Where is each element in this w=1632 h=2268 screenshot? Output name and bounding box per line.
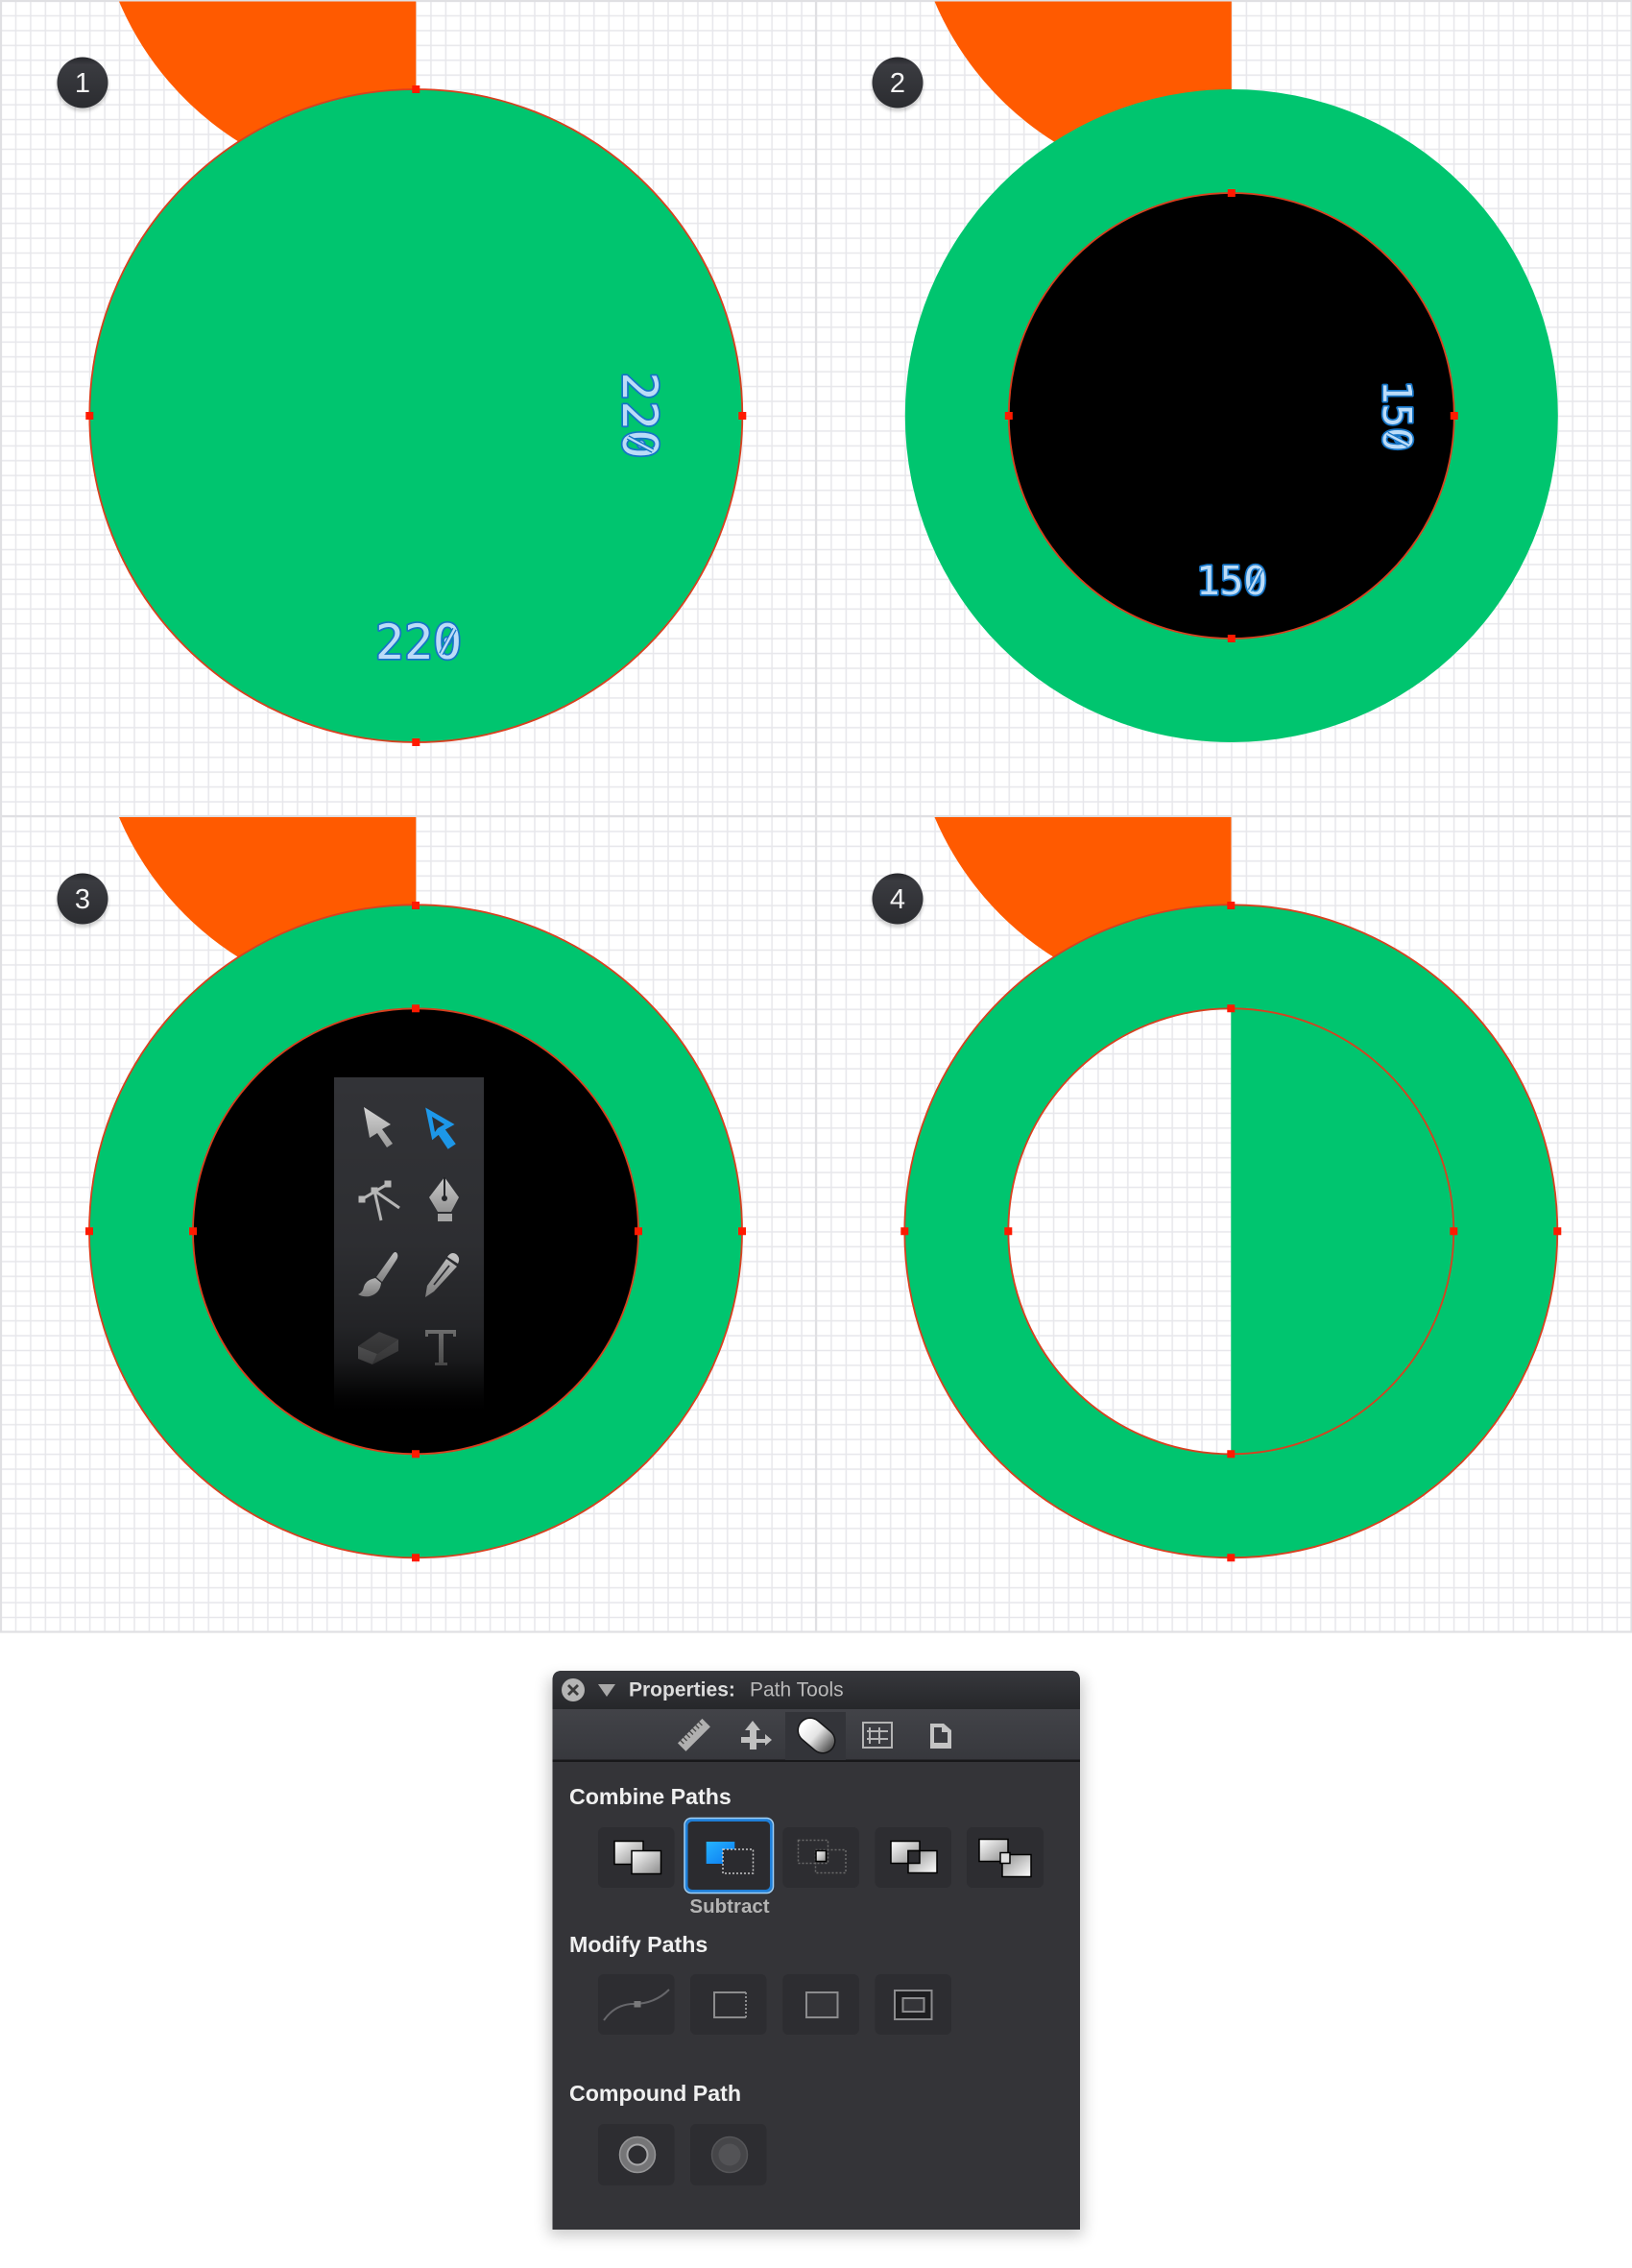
tools panel bbox=[334, 1077, 484, 1410]
step badge 4 bbox=[872, 874, 924, 928]
icon: pencil bbox=[425, 1253, 459, 1297]
title bar bbox=[553, 1671, 1080, 1709]
icon: document bbox=[930, 1724, 951, 1749]
icon: node tool bbox=[359, 1181, 399, 1220]
compound buttons bbox=[598, 2124, 766, 2185]
step badge 3: 3 bbox=[75, 884, 90, 915]
green circle bbox=[89, 89, 742, 742]
button: unite bbox=[598, 1827, 674, 1888]
black inner circle bbox=[1009, 193, 1454, 639]
green right half bbox=[1231, 1008, 1453, 1454]
step badge 1 bbox=[57, 58, 108, 111]
button: closed rectangle bbox=[782, 1974, 859, 2035]
button: release compound bbox=[690, 2124, 766, 2185]
button: subtract selected bbox=[684, 1819, 774, 1894]
icon: grid bbox=[863, 1723, 892, 1748]
anchor points bbox=[900, 902, 1561, 1561]
button: flatten curve bbox=[598, 1974, 674, 2035]
title text: Properties: bbox=[629, 1678, 735, 1701]
button: divide bbox=[967, 1827, 1044, 1888]
icon: pen tool bbox=[429, 1177, 459, 1221]
green ring bbox=[956, 956, 1505, 1506]
combine buttons bbox=[598, 1819, 1044, 1894]
icon: close button bbox=[562, 1678, 585, 1701]
icon: collapse triangle bbox=[598, 1684, 615, 1697]
icon: eraser bbox=[358, 1332, 398, 1364]
step badge 2 bbox=[872, 58, 924, 111]
heading: modify paths: Modify Paths bbox=[569, 1932, 708, 1957]
icon: move arrows bbox=[741, 1721, 772, 1749]
orange shape bbox=[119, 817, 416, 960]
icon: brush bbox=[358, 1252, 397, 1296]
path outlines bbox=[904, 905, 1557, 1557]
panel: step 3 bbox=[57, 817, 746, 1561]
step badge 2: 2 bbox=[890, 68, 905, 99]
panel: step 1 bbox=[57, 2, 746, 746]
button: offset rectangle bbox=[876, 1974, 951, 2035]
tooltip: subtract: Subtract bbox=[689, 1895, 770, 1918]
step badge 3 bbox=[57, 874, 108, 928]
height label: 150 bbox=[1374, 380, 1420, 451]
icon: combine circles bbox=[810, 1730, 823, 1741]
anchor points bbox=[85, 902, 746, 1561]
step badge 4: 4 bbox=[890, 884, 905, 915]
heading: combine paths: Combine Paths bbox=[569, 1784, 732, 1809]
orange shape bbox=[119, 2, 416, 144]
panel: step 4 bbox=[872, 817, 1561, 1561]
green ring bbox=[89, 905, 742, 1557]
button: exclude bbox=[876, 1827, 951, 1888]
icon: ruler bbox=[678, 1719, 710, 1751]
icon: type tool bbox=[425, 1330, 456, 1365]
panel: properties path tools bbox=[549, 1671, 1083, 2235]
orange shape bbox=[935, 2, 1232, 144]
panel body bbox=[553, 1671, 1080, 2230]
height label: 220 bbox=[612, 372, 667, 459]
orange shape bbox=[935, 817, 1231, 960]
button: make compound bbox=[598, 2124, 674, 2185]
heading: compound path: Compound Path bbox=[569, 2081, 741, 2106]
black inner circle bbox=[193, 1008, 638, 1454]
modify buttons bbox=[598, 1974, 951, 2035]
panel shadow bbox=[549, 1678, 1083, 2235]
button: open rectangle bbox=[690, 1974, 766, 2035]
tab bar bbox=[553, 1709, 1080, 1762]
width label: 220 bbox=[375, 615, 462, 670]
button: intersect bbox=[782, 1827, 859, 1888]
step badge 1: 1 bbox=[75, 68, 90, 99]
anchor points bbox=[1005, 189, 1458, 642]
title text: Path Tools bbox=[750, 1678, 844, 1701]
icon: arrow tool bbox=[364, 1107, 393, 1147]
icon: direct selection arrow bbox=[427, 1110, 454, 1147]
green circle bbox=[905, 89, 1558, 742]
panel: step 2 bbox=[872, 2, 1558, 742]
width label: 150 bbox=[1196, 558, 1267, 604]
anchor points bbox=[85, 85, 746, 746]
